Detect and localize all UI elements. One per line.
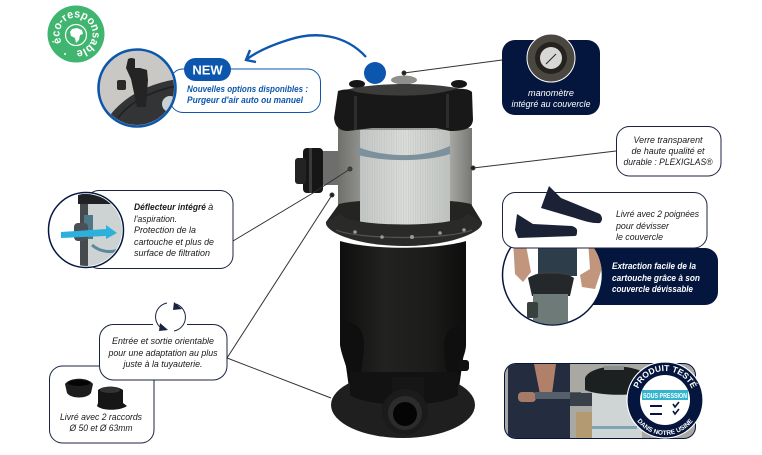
deflector text: surface de filtration: [134, 248, 210, 259]
leader lines: inlet and outlet: [227, 193, 334, 398]
new options text: [187, 84, 308, 106]
badge: tested under pressure: PRODUIT TESTÉ: [633, 365, 698, 388]
new pill: NEW: [192, 62, 223, 78]
panel: plexiglas: de haute qualité et: [632, 146, 705, 157]
flange front ring: [326, 214, 482, 246]
lid: [334, 76, 473, 131]
test photo: [505, 364, 695, 438]
manometer text: intégré au couvercle: [512, 99, 590, 110]
orientable text: juste à la tuyauterie.: [122, 359, 202, 370]
icon: checklist: [650, 402, 679, 414]
icon: two fittings: [65, 379, 127, 410]
manometer text: manomètre: [528, 88, 574, 99]
leader line: plexiglas: [471, 151, 616, 170]
outlet pipe: [382, 377, 428, 435]
product: pool cartridge filter: [295, 76, 482, 438]
handles text: Livré avec 2 poignées: [616, 209, 699, 220]
orientable text: Entrée et sortie orientable: [112, 336, 214, 347]
panel: fittings: [50, 366, 154, 443]
cartridge: [358, 130, 450, 229]
icon: pressure gauge: [527, 34, 575, 82]
panel: plexiglas: durable : PLEXIGLAS®: [624, 157, 712, 168]
lower tank: [340, 241, 466, 372]
new options text: Nouvelles options disponibles :: [187, 84, 308, 95]
extraction text: Extraction facile de la: [612, 261, 696, 272]
orientable text: [108, 336, 218, 370]
leader line: deflector: [233, 167, 352, 241]
panel: plexiglas: Verre transparent: [634, 135, 703, 146]
panel: deflector: [48, 190, 233, 270]
extraction photo: [502, 247, 602, 326]
panel: manometer: [502, 34, 600, 115]
badge: tested under pressure: DANS NOTRE USINE: [637, 418, 693, 435]
fittings text: Ø 50 et Ø 63mm: [69, 423, 133, 434]
icon: handles: [515, 186, 602, 238]
badge: tested under pressure: SOUS PRESSION: [643, 391, 687, 400]
handles text: le couvercle: [616, 232, 663, 243]
badge: tested under pressure: [626, 362, 702, 439]
blue marker dot: [364, 62, 386, 84]
small side plug: [458, 360, 469, 371]
leader line: manometer: [402, 60, 502, 75]
fittings text: [60, 412, 142, 434]
handles text: pour dévisser: [615, 221, 670, 232]
new options text: Purgeur d'air auto ou manuel: [187, 95, 303, 106]
icon: globe: [66, 24, 86, 46]
deflector text: cartouche et plus de: [134, 237, 214, 248]
flange back: [326, 200, 482, 240]
deflector text: l'aspiration.: [134, 214, 177, 225]
extraction text: [612, 261, 700, 295]
transparent cylinder: [338, 128, 472, 210]
fittings text: Livré avec 2 raccords: [60, 412, 142, 423]
eco-responsable badge: éco-responsable: [52, 11, 99, 57]
deflector text: à: [208, 202, 213, 213]
base plate: [331, 372, 475, 438]
callout box: [170, 69, 320, 112]
deflector text: [134, 202, 214, 259]
orientable text: pour une adaptation au plus: [108, 348, 218, 359]
deflector photo: [48, 192, 124, 270]
icon: rotation arrows: [153, 302, 187, 331]
panel: handles: [502, 186, 707, 248]
left union valve: [295, 148, 342, 193]
curved arrow to new option: [246, 35, 366, 62]
panel: orientable inlet and outlet: [100, 302, 227, 380]
tank side ribs: [342, 318, 464, 395]
manometer text: [512, 88, 590, 110]
panel: plexiglas: [616, 126, 721, 176]
new options callout: [98, 50, 320, 130]
new option photo: [98, 50, 178, 130]
deflector text: Protection de la: [134, 225, 196, 236]
panel: pressure test: [504, 362, 702, 439]
new pill: [184, 58, 231, 81]
extraction text: couvercle dévissable: [612, 284, 694, 295]
extraction text: cartouche grâce à son: [612, 273, 700, 284]
handles text: [615, 209, 699, 243]
deflector text: Déflecteur intégré: [134, 202, 207, 213]
panel: extraction: [502, 247, 718, 326]
